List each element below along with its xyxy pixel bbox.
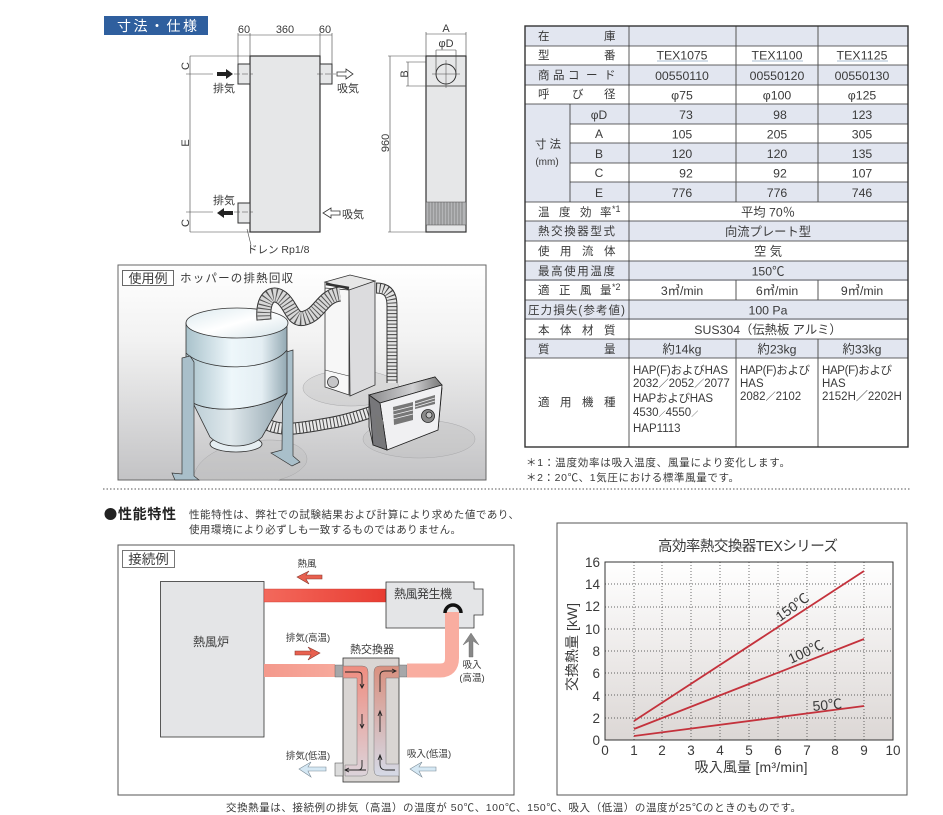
performance note: 使用環境により必ずしも一致するものではありません。 (189, 523, 461, 536)
hopper leg front (172, 356, 199, 480)
applicable models: HAPおよびHAS (633, 392, 713, 405)
row labels: 熱交換器型式 (538, 224, 616, 238)
model columns: 746 (852, 186, 872, 200)
footnotes (526, 456, 790, 484)
furnace: 熱風炉 (193, 635, 229, 649)
row labels: 適用機種 (538, 395, 616, 409)
duct circle (436, 64, 456, 84)
model columns: TEX1075 (656, 48, 708, 62)
label: 接続例 (122, 550, 174, 568)
hot air generator (386, 582, 483, 628)
y axis ticks: 12 (585, 599, 600, 614)
y axis ticks: 0 (592, 733, 600, 748)
hot air duct (264, 589, 386, 602)
model columns: 平均 70％ (741, 206, 795, 220)
bottom note: 交換熱量は、接続例の排気（高温）の温度が 50℃、100℃、150℃、吸入（低温）の温度が25℃のときのものです。 (226, 801, 801, 814)
dimension numbers: 60 (238, 24, 250, 36)
side dimension labels: A (442, 23, 450, 35)
model underlines (657, 60, 888, 62)
arrow: hot air: 熱風 (297, 558, 317, 570)
x axis ticks (601, 743, 901, 758)
model columns: φ125 (848, 88, 876, 102)
model columns (655, 48, 890, 356)
x axis ticks: 4 (716, 743, 724, 758)
row labels: 呼び径 (538, 88, 616, 101)
arrow: intake low temp: 吸入(低温) (407, 748, 451, 760)
connectors (335, 665, 343, 677)
row labels: 使用流体 (538, 244, 616, 258)
duct port (445, 605, 461, 613)
side dimension labels (380, 23, 454, 152)
plot area (605, 562, 893, 740)
model columns: SUS304（伝熱板 アルミ） (694, 323, 842, 337)
row labels: 適正風量 (538, 283, 612, 297)
x axis ticks: 7 (803, 743, 811, 758)
airflow arrows and labels: 吸気 (337, 81, 359, 95)
arrow: exhaust low temp: 排気(低温) (286, 750, 330, 762)
model columns: TEX1100 (752, 48, 803, 62)
model columns: 3㎥/min (661, 284, 703, 298)
applicable models: 2152H／2202H (822, 389, 902, 403)
model columns: φ75 (671, 88, 693, 102)
model columns: 約14kg (663, 342, 702, 356)
arrow: exhaust high temp (286, 632, 330, 660)
dimension lines (186, 33, 336, 245)
model columns: TEX1125 (836, 48, 888, 62)
panel: usage example (118, 265, 486, 480)
flow arrows (345, 669, 396, 772)
hopper legs back (271, 350, 300, 466)
row labels: φD (591, 108, 608, 122)
hot air generator (369, 377, 442, 450)
model columns: 92 (773, 166, 787, 180)
row labels (528, 29, 625, 409)
intake duct (407, 612, 452, 670)
row labels: *1 (612, 204, 621, 214)
applicable models: HAP(F)および (822, 364, 892, 377)
x axis ticks: 8 (831, 743, 839, 758)
model columns: φ100 (763, 88, 791, 102)
drawing: front view (180, 24, 364, 256)
y axis ticks: 10 (585, 622, 600, 637)
furnace (160, 582, 264, 737)
panel: performance chart: 吸入風量 [m³/min] (694, 759, 808, 775)
applicable models: 2082／2102 (740, 391, 801, 403)
front view body (250, 56, 320, 232)
dimension numbers: E (180, 139, 192, 147)
row labels: *2 (612, 282, 621, 292)
floor shadows (193, 370, 475, 480)
arrow: hot air (297, 558, 322, 584)
model columns: 135 (852, 147, 872, 161)
applicable models (633, 364, 902, 435)
model columns: 120 (672, 147, 692, 161)
x axis ticks: 5 (745, 743, 753, 758)
model columns: 00550120 (750, 69, 805, 83)
model columns: 305 (852, 128, 872, 142)
model columns: 約33kg (843, 342, 882, 356)
y axis ticks: 6 (592, 666, 600, 681)
dimension numbers: C (180, 62, 192, 70)
arrow: intake high temp: 吸入 (462, 660, 482, 671)
row labels: E (595, 186, 603, 200)
airflow arrows and labels: 吸気 (342, 207, 364, 221)
curve labels: 100℃ (786, 636, 826, 667)
footnotes: ＊2：20℃、1気圧における標準風量です。 (526, 471, 739, 484)
footnotes: ＊1：温度効率は吸入温度、風量により変化します。 (526, 456, 790, 469)
chart title: 高効率熱交換器TEXシリーズ (658, 538, 838, 555)
x axis ticks: 6 (774, 743, 782, 758)
axis titles: 交換熱量 [kW] (564, 603, 580, 691)
row labels: 型番 (538, 48, 616, 62)
model columns: 776 (672, 186, 692, 200)
applicable models: 2032／2052／2077 (633, 378, 730, 390)
model columns: 約23kg (758, 342, 797, 356)
model columns: 98 (773, 108, 787, 122)
model columns: 00550130 (835, 69, 890, 83)
label: 接続例: 接続例 (128, 551, 169, 567)
x axis ticks: 10 (885, 743, 901, 758)
arrow: intake high temp: (高温) (459, 672, 485, 684)
x axis ticks: 0 (601, 743, 609, 758)
curve labels: 150℃ (772, 590, 812, 624)
y axis ticks: 16 (585, 555, 600, 570)
y axis ticks: 2 (592, 711, 600, 726)
row labels: 商品コード (538, 69, 616, 82)
row labels: 本体材質 (538, 323, 616, 337)
x axis ticks: 2 (658, 743, 666, 758)
side dimension labels: 960 (380, 134, 392, 152)
model columns: 向流プレート型 (725, 224, 811, 239)
row labels: B (595, 147, 603, 161)
model columns: 00550110 (655, 69, 709, 83)
model columns: 120 (767, 147, 787, 161)
shaded rows (525, 26, 908, 358)
model columns: 150℃ (752, 264, 784, 278)
y axis ticks: 8 (592, 644, 600, 659)
flexible hoses at exchanger and generator (268, 288, 392, 429)
side dimension labels: φD (438, 38, 454, 50)
row labels: (mm) (535, 157, 559, 168)
airflow arrows and labels (213, 69, 364, 256)
y axis ticks: 14 (585, 577, 600, 592)
arrow: intake high temp (459, 633, 485, 684)
arrow: intake low temp (407, 748, 451, 777)
model columns: 107 (852, 166, 872, 180)
model columns: 205 (767, 128, 787, 142)
vents (375, 395, 435, 440)
side dimension lines (388, 32, 466, 232)
y axis ticks (585, 555, 600, 748)
row labels: 圧力損失(参考値) (528, 303, 625, 317)
row labels: C (595, 166, 604, 180)
model columns: 空 気 (754, 244, 782, 258)
x axis ticks: 9 (860, 743, 868, 758)
model columns: 73 (679, 108, 693, 122)
panel: connection example (118, 545, 514, 795)
applicable models: HAS (740, 378, 764, 390)
model columns: 123 (852, 108, 872, 122)
row labels: 寸法 (535, 137, 562, 151)
heat exchanger (335, 643, 407, 782)
heading: 性能特性: 性能特性 (118, 506, 176, 522)
row labels: A (595, 127, 603, 141)
line: 100℃ (634, 639, 864, 729)
table: specifications (525, 26, 908, 447)
grid lines (525, 26, 908, 447)
y axis ticks: 4 (592, 689, 600, 704)
line: 50℃ (634, 706, 864, 736)
panel: performance chart (557, 523, 907, 795)
side dimension labels: B (399, 70, 411, 78)
label: 使用例: 使用例 (128, 271, 168, 286)
model columns: 6㎥/min (756, 284, 798, 298)
applicable models: HAS (822, 378, 846, 390)
applicable models: HAP1113 (633, 423, 681, 435)
heat exchanger: 熱交換器 (350, 643, 394, 656)
line: 150℃ (634, 571, 864, 721)
model columns: 105 (672, 128, 692, 142)
hose from hopper to exchanger (264, 294, 340, 320)
performance note (189, 508, 519, 536)
applicable models: HAP(F)および (740, 364, 810, 377)
model columns: 9㎥/min (841, 284, 883, 298)
performance note: 性能特性は、弊社での試験結果および計算により求めた値であり、 (189, 508, 519, 521)
louver (426, 202, 466, 225)
caption: ホッパーの排熱回収 (180, 271, 294, 285)
upper and lower stubs (238, 64, 332, 223)
dimension numbers: 60 (319, 24, 331, 36)
x axis ticks: 3 (687, 743, 695, 758)
hot air generator: 熱風発生機 (394, 587, 452, 601)
row labels: 質量 (538, 342, 616, 356)
arrow: exhaust low temp (286, 750, 330, 777)
drawing: side view (380, 23, 466, 232)
airflow arrows and labels: ドレン Rp1/8 (247, 244, 310, 256)
curve labels (772, 590, 843, 714)
applicable models: HAP(F)およびHAS (633, 364, 728, 377)
row labels: 温度効率 (538, 205, 612, 219)
airflow arrows and labels: 排気 (213, 193, 235, 207)
curve labels: 50℃ (812, 695, 843, 714)
applicable models: 4530／4550／ (633, 407, 698, 419)
heading: 寸法・仕様 (104, 16, 208, 35)
heat exchanger unit (325, 275, 375, 396)
model columns: 100 Pa (749, 304, 788, 318)
dimension numbers: C (180, 219, 192, 227)
x axis ticks: 1 (630, 743, 638, 758)
exhaust duct (264, 664, 335, 677)
row labels: 最高使用温度 (538, 264, 616, 278)
dimension numbers: 360 (276, 24, 294, 36)
heading: 寸法・仕様: 寸法・仕様 (117, 18, 197, 34)
hopper tank (186, 308, 288, 452)
model columns: 776 (767, 186, 787, 200)
model columns: 92 (679, 166, 693, 180)
row labels: 在庫 (538, 29, 616, 43)
airflow arrows and labels: 排気 (213, 81, 235, 95)
arrow: exhaust high temp: 排気(高温) (286, 632, 330, 644)
dimension numbers (180, 24, 331, 227)
passages (343, 666, 368, 776)
